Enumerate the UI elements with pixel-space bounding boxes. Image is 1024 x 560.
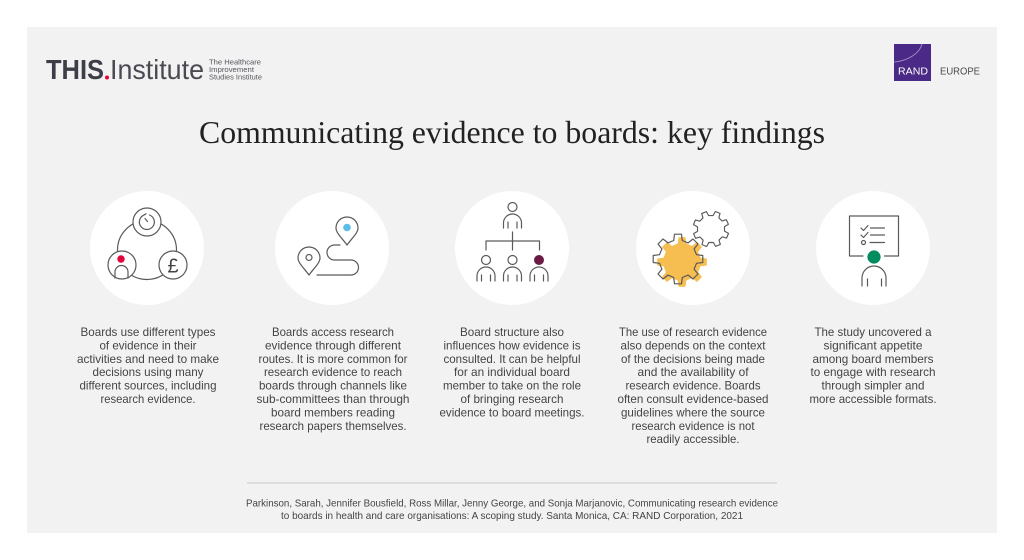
logo: THIS.Institute: The Healthcare (209, 58, 261, 66)
logo: THIS.Institute: Institute (110, 54, 204, 85)
text: finding 1: activities and need to make (77, 353, 219, 366)
text: finding 5: to engage with research (810, 366, 936, 379)
text: finding 1: of evidence in their (100, 339, 197, 352)
logo: RAND Europe: RAND (898, 66, 928, 78)
panel: finding 2, different routes (256, 191, 410, 433)
text: finding 4: readily accessible. (646, 433, 740, 446)
text: finding 3: for an individual board (454, 366, 570, 379)
logo: THIS.Institute: Improvement (209, 65, 255, 74)
panel: finding 1, different types of evidence (77, 191, 219, 406)
text: finding 2: research papers themselves. (260, 420, 406, 433)
text: finding 4: also depends on the context (620, 339, 766, 352)
panel: finding 3, board structure (440, 191, 584, 419)
text: finding 3: consulted. It can be helpful (444, 353, 580, 366)
text: finding 5: The study uncovered a (814, 326, 932, 339)
citation (246, 498, 778, 522)
text: finding 4: and the availability of (638, 366, 749, 379)
text: finding 4: guidelines where the source (621, 406, 765, 419)
text: finding 4: research evidence. Boards (626, 380, 761, 393)
text: finding 3: evidence to board meetings. (440, 406, 584, 419)
icon: evidence sources cycle (108, 208, 187, 280)
text: finding 4 (618, 326, 768, 446)
text: finding 4: research evidence is not (632, 420, 755, 433)
text: finding 3: of bringing research (460, 393, 564, 406)
icon: gears (653, 206, 734, 287)
text: finding 4: The use of research evidence (619, 326, 767, 339)
logo: THIS.Institute: Studies Institute (209, 72, 262, 82)
text: finding 5: among board members (812, 353, 934, 366)
text: finding 2: routes. It is more common for (258, 353, 408, 366)
text: finding 2: Boards access research (272, 326, 394, 339)
logo: RAND Europe (894, 44, 980, 81)
logo: RAND Europe: EUROPE (940, 66, 980, 78)
icon: evidence sources cycle: £ (167, 256, 179, 278)
text: finding 2: research evidence to reach (264, 366, 402, 379)
text: finding 1: different sources, including (80, 380, 216, 393)
panel: finding 4, context and availability (618, 191, 768, 446)
icon: map pins and route (298, 217, 359, 275)
text: finding 2 (256, 326, 410, 433)
text: finding 5: more accessible formats. (810, 393, 936, 406)
icon: organisation chart (477, 202, 548, 281)
text: finding 1: decisions using many (92, 366, 204, 379)
text: finding 2: board members reading (271, 406, 395, 419)
icon: person presenting checklist (850, 216, 898, 286)
text: finding 5: significant appetite (824, 339, 922, 352)
text: finding 2: boards through channels like (259, 380, 407, 393)
text: finding 2: sub-committees than through (256, 393, 410, 406)
logo: THIS.Institute (46, 54, 262, 85)
text: finding 3 (440, 326, 584, 419)
text: finding 1: Boards use different types (80, 326, 216, 339)
text: finding 5: through simpler and (822, 380, 924, 393)
text: finding 4: often consult evidence-based (618, 393, 768, 406)
text: finding 2: evidence through different (265, 339, 402, 352)
text: finding 4: of the decisions being made (621, 353, 765, 366)
text: finding 1 (77, 326, 219, 406)
citation: Parkinson, Sarah, Jennifer Bousfield, Ross Millar, Jenny George, and Sonja Marjanovic, Communicating research evidence (246, 498, 778, 510)
logo: THIS.Institute: THIS (46, 54, 104, 85)
text: finding 3: influences how evidence is (444, 339, 581, 352)
text: finding 3: member to take on the role (443, 380, 581, 393)
title: Communicating evidence to boards: key findings (199, 114, 825, 150)
text: finding 3: Board structure also (460, 326, 564, 339)
text: finding 5 (810, 326, 936, 406)
citation: to boards in health and care organisations: A scoping study. Santa Monica, CA: RAND Corporation, 2021 (281, 511, 743, 522)
panel: finding 5, appetite for accessible formats (810, 191, 936, 406)
text: finding 1: research evidence. (100, 393, 196, 406)
